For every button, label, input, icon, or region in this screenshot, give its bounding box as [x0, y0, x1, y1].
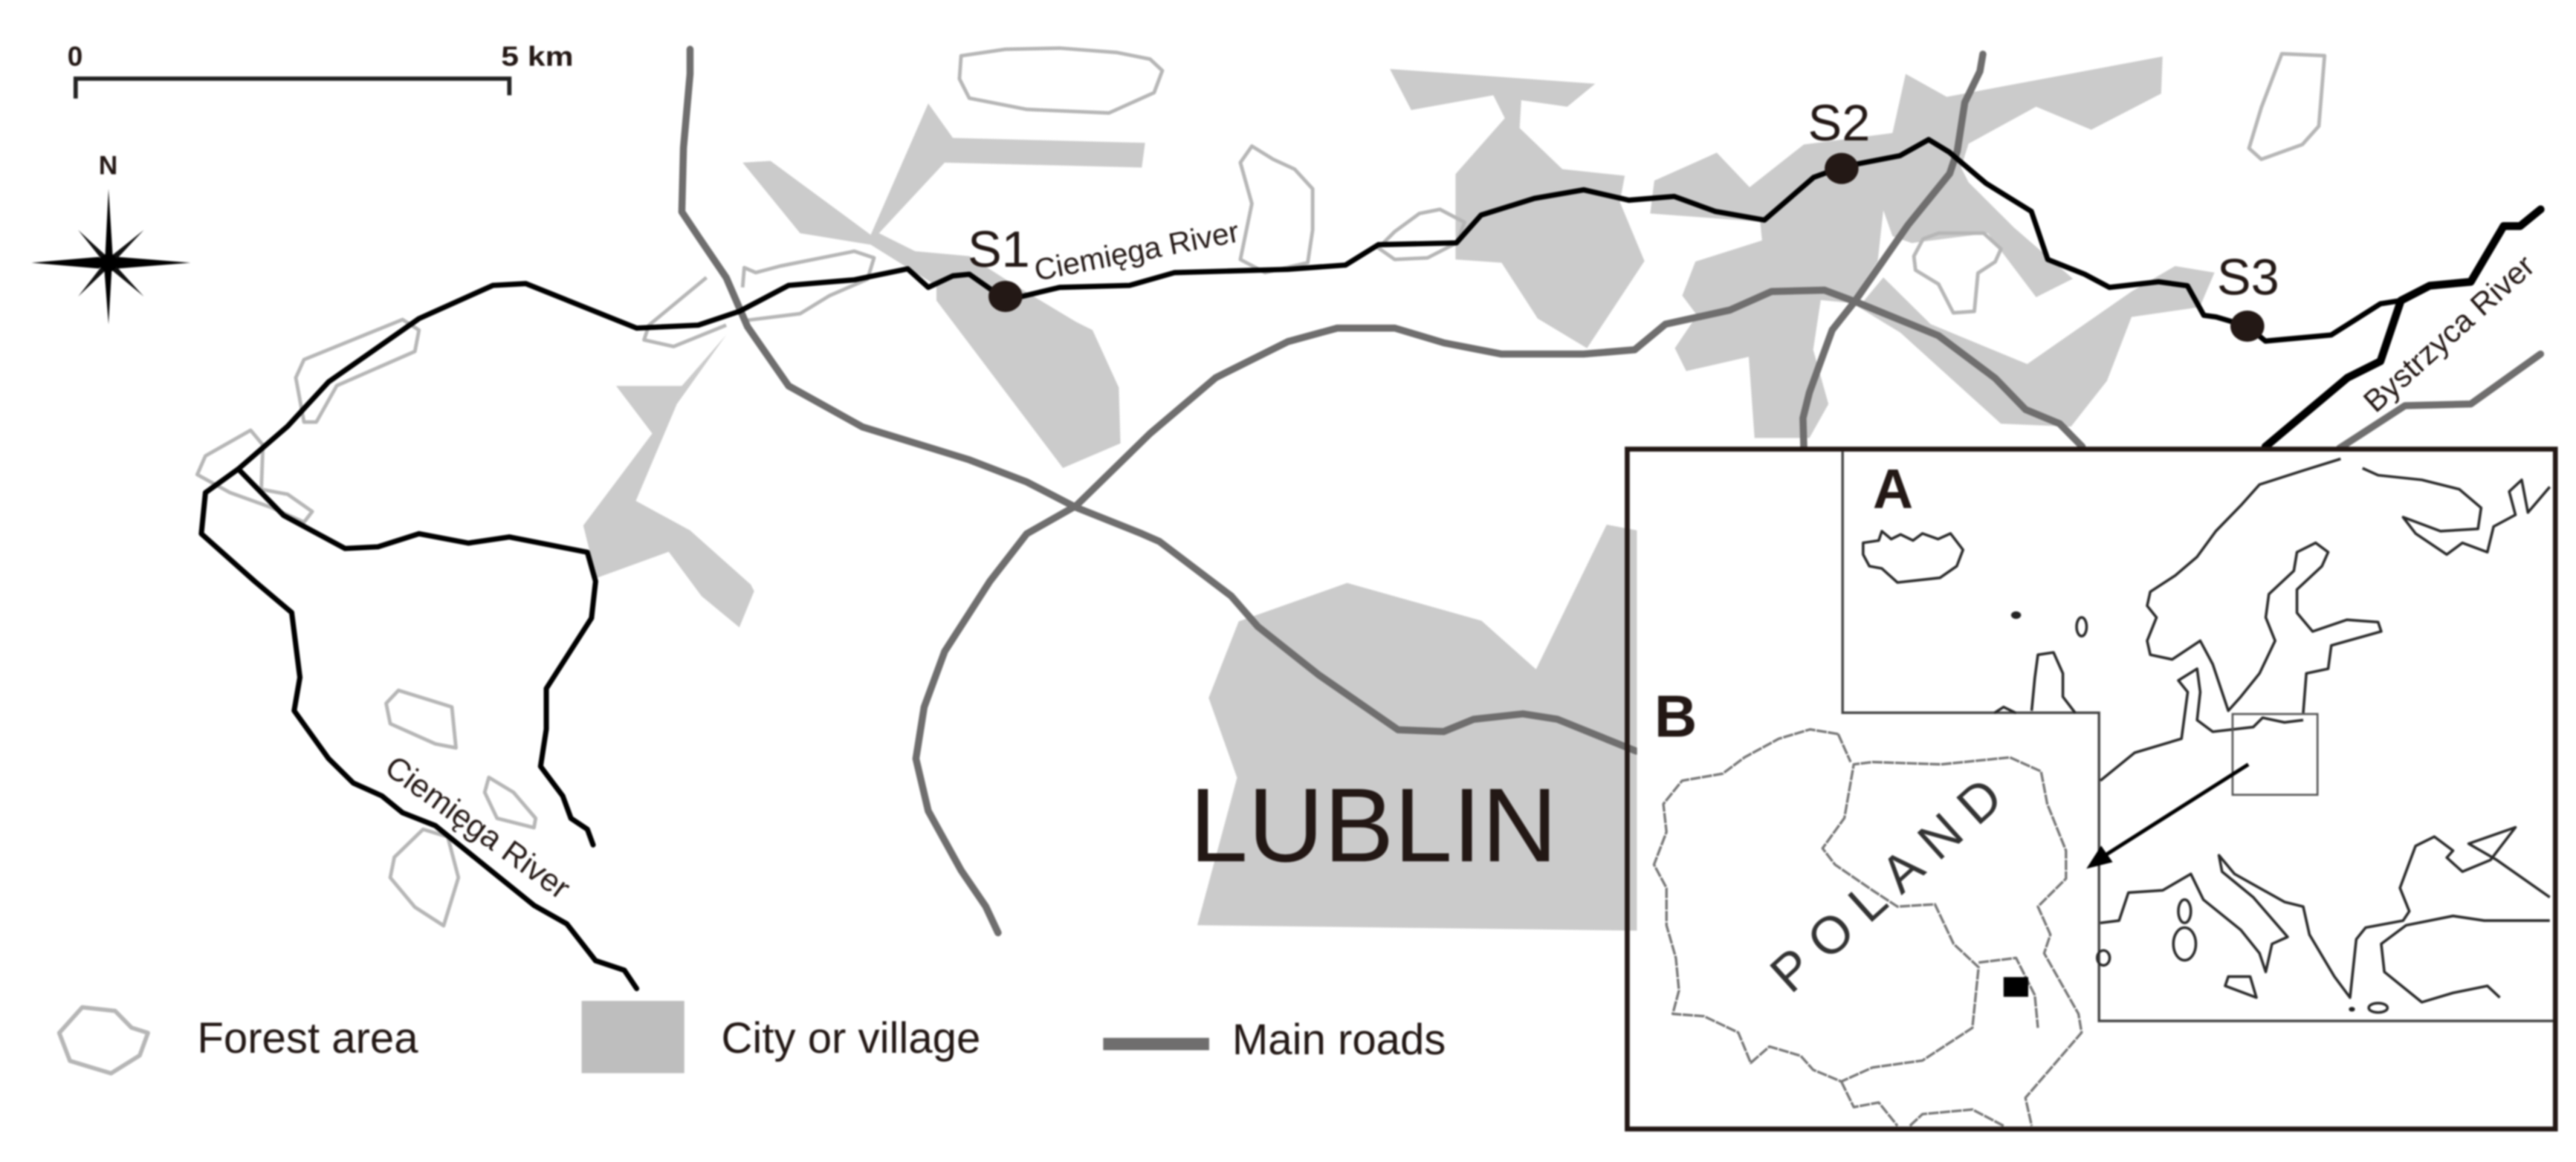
north arrow compass: N — [99, 151, 117, 180]
legend: city or village — [582, 1001, 980, 1073]
map B: Poland borders — [1654, 730, 2082, 1126]
legend: forest area — [59, 1007, 418, 1074]
river label Bystrzyca: Bystrzyca River — [2357, 248, 2541, 419]
legend: forest area: Forest area — [197, 1014, 418, 1062]
sampling site S2 — [1808, 94, 1870, 184]
label: B: B — [1654, 683, 1697, 749]
north arrow compass — [31, 151, 191, 325]
label: A: A — [1873, 458, 1913, 520]
city label Lublin: LUBLIN — [1189, 766, 1558, 883]
scale bar: 0 — [68, 41, 82, 71]
map A: Europe coastlines — [1863, 459, 2550, 1013]
scale bar: 5 km — [501, 41, 574, 71]
legend: main roads: Main roads — [1232, 1016, 1446, 1064]
river label upper: Ciemięga River — [1032, 214, 1242, 288]
Ciemięga River lines — [201, 140, 2401, 989]
legend: main roads — [1103, 1016, 1446, 1064]
sampling site S3 — [2217, 249, 2279, 342]
forest areas — [197, 48, 2325, 926]
inset outer border — [1627, 449, 2555, 1129]
inset frame lines — [1842, 452, 2553, 1021]
inset panel: location in Europe and Poland — [1627, 448, 2555, 1129]
Bystrzyca River line — [2265, 210, 2540, 447]
sampling site S1: S1 — [968, 221, 1030, 278]
sampling site S1 — [968, 221, 1030, 312]
arrow from locator box to Poland — [2086, 765, 2248, 869]
legend: city or village: City or village — [721, 1014, 980, 1062]
city and village areas — [583, 56, 2215, 931]
scale bar — [68, 41, 574, 99]
locator box on Europe map — [2233, 714, 2317, 795]
main roads — [682, 49, 2540, 932]
river label lower: Ciemięga River — [378, 749, 577, 906]
Lublin location marker — [2004, 977, 2028, 997]
sampling site S3: S3 — [2217, 249, 2279, 306]
label: Poland: POLAND — [1759, 767, 2013, 1004]
sampling site S2: S2 — [1808, 94, 1870, 152]
